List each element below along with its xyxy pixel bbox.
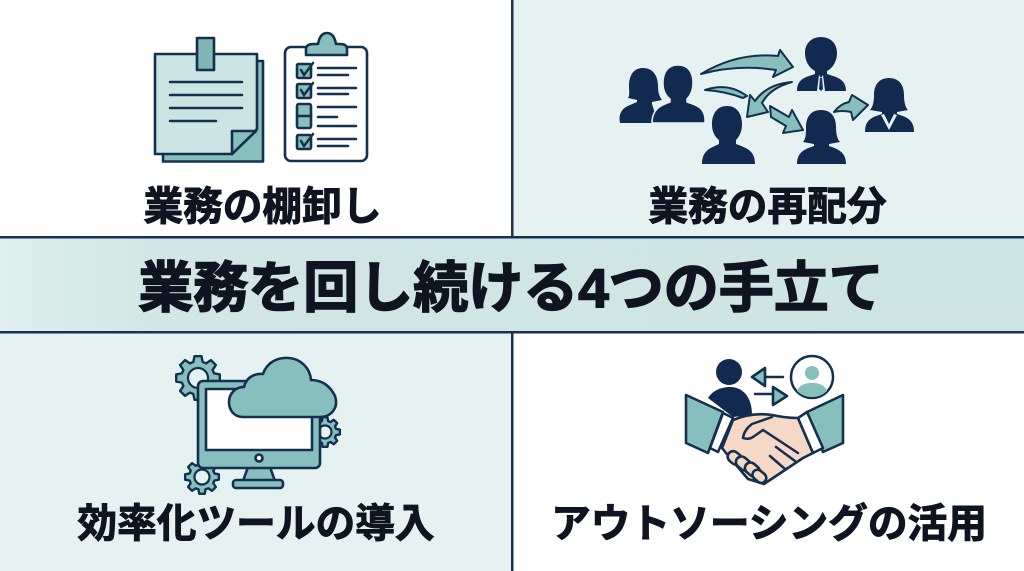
heading: 業務の再配分: 業務の再配分 <box>648 185 887 229</box>
icon: people reassignment <box>619 37 914 164</box>
title: 業務を回し続ける4つの手立て <box>138 257 884 319</box>
icon: outsourcing handshake <box>686 356 843 485</box>
panel: 効率化ツールの導入 <box>0 332 512 571</box>
icon: gear bottom left <box>185 460 219 494</box>
heading: アウトソーシングの活用: アウトソーシングの活用 <box>551 502 987 546</box>
panel: 業務の棚卸し <box>0 0 512 237</box>
icon: checklist clipboard <box>285 33 367 161</box>
icon: gear top left <box>176 356 220 400</box>
heading: 業務の棚卸し: 業務の棚卸し <box>143 185 382 229</box>
panel: title band <box>0 237 1024 332</box>
panel: アウトソーシングの活用 <box>512 332 1024 571</box>
icon: gear right <box>310 417 340 447</box>
icon: computer, cloud and gears <box>176 356 340 494</box>
heading: 効率化ツールの導入: 効率化ツールの導入 <box>77 502 435 546</box>
icon: sticky notes <box>155 38 263 162</box>
panel: 業務の再配分 <box>512 0 1024 237</box>
